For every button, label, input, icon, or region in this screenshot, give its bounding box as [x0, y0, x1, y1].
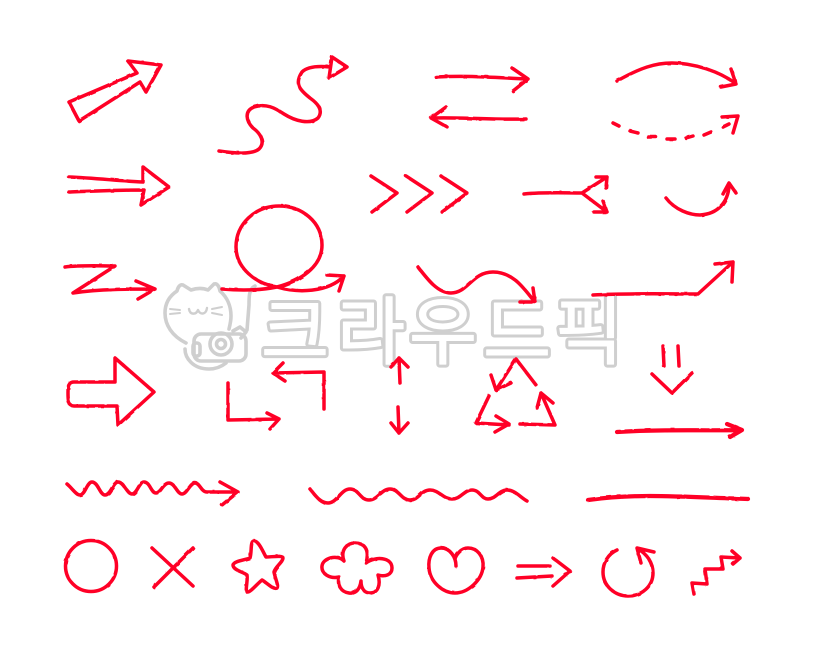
arrow: wave: [418, 267, 535, 302]
logo wordmark: 크라우드픽: [261, 291, 623, 374]
arrow: left long: [431, 107, 526, 127]
shape: cross: [152, 548, 193, 587]
arrow: circular: [603, 548, 654, 596]
arrow: outlined diagonal: [69, 61, 161, 121]
arrow: vertical up: [391, 358, 408, 383]
arrow: zigzag: [65, 266, 155, 299]
arrow: double down: [652, 346, 692, 393]
shape: star: [233, 541, 283, 592]
arrow: curved up: [666, 183, 736, 215]
arrow: stairs: [692, 551, 740, 594]
arrow: triple chevrons: [371, 176, 467, 212]
watermark: crowdpic logo: [165, 284, 623, 374]
shape: cloud: [322, 543, 392, 593]
arrow: small double: [517, 558, 570, 586]
line: long wave: [310, 489, 527, 503]
arrow: long straight: [617, 424, 742, 437]
shape: heart: [429, 548, 483, 593]
arrow: fat outline: [68, 358, 154, 425]
arrow: double shaft: [69, 167, 169, 205]
arrow: dashed arc under: [613, 116, 738, 139]
icon: cat with camera: [165, 284, 255, 369]
arrow: vertical down: [391, 407, 408, 433]
line: straight: [588, 496, 748, 500]
logo wordmark: 크라우드픽: [261, 291, 623, 374]
arrow: corner right: [228, 383, 279, 429]
arrow: arc over: [617, 63, 736, 87]
arrow: loop circle: [222, 206, 344, 291]
shape: circle: [66, 540, 116, 592]
arrow: forked: [524, 177, 607, 212]
arrow: squiggle with triangle head: [219, 57, 347, 153]
arrow: bent rising: [593, 262, 733, 295]
arrow: right long: [436, 68, 528, 91]
arrow: wavy line: [67, 482, 238, 505]
arrow: corner left: [273, 363, 324, 409]
arrows: recycling triangle: [476, 359, 555, 432]
